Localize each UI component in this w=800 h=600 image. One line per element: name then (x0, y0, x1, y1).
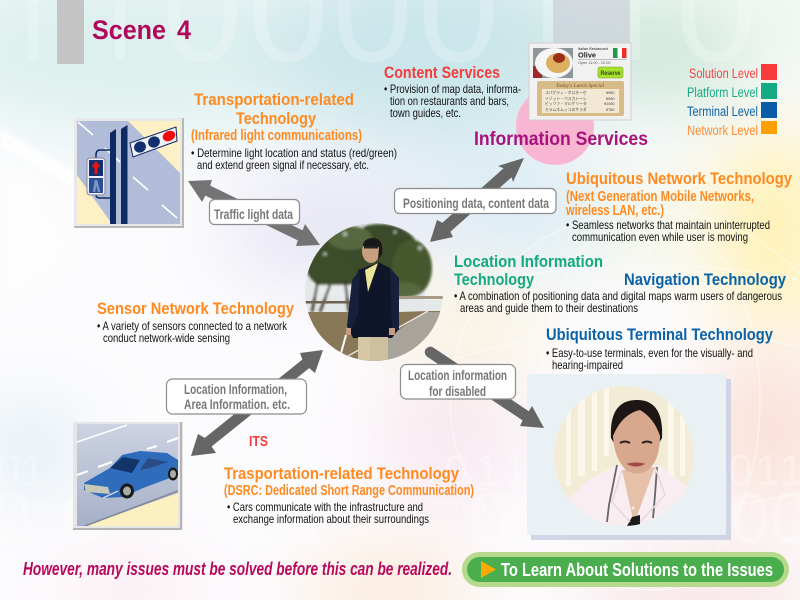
background digits bottom: 01001101 (732, 498, 800, 514)
text: content services description (384, 82, 521, 120)
text: network description (566, 218, 770, 244)
heading: transportation-related technology DSRC: (DSRC: Dedicated Short Range Communication) (224, 483, 474, 499)
text: network description: communication even while user is moving (572, 230, 748, 244)
heading: location information technology (454, 252, 603, 289)
text: terminal description: hearing-impaired (552, 358, 623, 372)
panel: doctor (527, 374, 731, 540)
heading: ubiquitous network technology: wireless LAN, etc.) (565, 203, 664, 219)
label: positioning data: Positioning data, content data (403, 195, 549, 211)
heading: ubiquitous network technology: (Next Generation Mobile Networks, (566, 189, 754, 205)
pink circle (516, 87, 594, 165)
restaurant card: リゾット・ペスカトーレ (545, 96, 587, 101)
heading: ubiquitous network technology (565, 169, 792, 219)
heading: transportation-related technology (191, 90, 362, 144)
label: location information (166, 379, 306, 414)
label: traffic light data: Traffic light data (214, 206, 293, 222)
restaurant card: ¥980 (606, 97, 614, 101)
background digits bottom: 10000 (190, 446, 306, 495)
restaurant card: スパゲティ・ボロネーゼ (545, 90, 587, 95)
background digits bottom (0, 446, 800, 559)
heading: content services: Content Services (384, 63, 500, 82)
text: traffic light description: and extend green signal if necessary, etc. (197, 158, 369, 172)
text: traffic light description (191, 146, 397, 172)
legend: terminal level: Terminal Level (687, 104, 758, 119)
text: DSRC description: • Cars communicate with the infrastructure and (227, 500, 423, 514)
heading: transportation-related technology DSRC (224, 464, 474, 499)
text: DSRC description (227, 500, 429, 526)
icon: play triangle (481, 561, 496, 578)
restaurant card: ¥1080 (604, 102, 615, 106)
restaurant card: Today's Lunch Special (556, 84, 605, 89)
label: location information: Area Information. etc. (184, 396, 290, 412)
heading: ITS: ITS (249, 433, 268, 450)
label: traffic light data (210, 200, 300, 224)
text: content services description: tion on restaurants and bars, (390, 94, 509, 108)
heading: transportation-related technology: Technology (236, 109, 316, 128)
legend: platform level: Platform Level (687, 85, 758, 100)
arrow: location information (191, 350, 323, 456)
button: learn about solutions (462, 552, 789, 587)
title: 4 (177, 15, 191, 45)
arrow: location information for disabled (425, 347, 544, 428)
scene tab marker (57, 0, 84, 64)
legend (687, 64, 777, 138)
arrow: traffic light data (188, 180, 320, 246)
text: content services description: town guides, etc. (390, 106, 461, 120)
legend: network level: Network Level (687, 123, 758, 138)
title: Scene (92, 15, 166, 45)
restaurant card: Italian Restaurant (578, 47, 609, 51)
restaurant card: Open 11:00 - 22:00 (578, 61, 610, 65)
legend: solution level: Solution Level (689, 66, 758, 81)
photo: man with white cane (305, 223, 445, 367)
background digits bottom: 1101010011 (430, 498, 527, 514)
heading: location information technology: Location Information (454, 252, 603, 271)
text: location description (454, 289, 782, 315)
restaurant card: ピッツァ・マルゲリータ (545, 101, 587, 106)
callout: issues: However, many issues must be solved before this can be realized. (23, 559, 452, 579)
label: location information for disabled (400, 364, 516, 399)
text: sensor description (97, 319, 288, 345)
background digits bottom: 011 (444, 446, 528, 495)
text: DSRC description: exchange information about their surroundings (233, 512, 429, 526)
grey block behind digits (553, 0, 630, 60)
restaurant card (529, 43, 631, 120)
text: content services description: • Provision of map data, informa- (384, 82, 521, 96)
arrow: positioning data (430, 158, 524, 242)
background digits bottom: 1 (190, 479, 230, 559)
icon: car (73, 422, 183, 529)
heading: sensor network technology: Sensor Network Technology (97, 299, 294, 318)
heading: transportation-related technology DSRC: Trasportation-related Technology (224, 464, 459, 483)
restaurant card: Reserve (600, 71, 621, 77)
heading: information services: Information Services (474, 129, 648, 150)
text: sensor description: conduct network-wide sensing (103, 331, 230, 345)
background digits bottom: 01 (470, 479, 550, 559)
text: sensor description: • A variety of sensors connected to a network (97, 319, 288, 333)
label: location information for disabled: for disabled (429, 383, 486, 399)
restaurant card: Olive (578, 50, 596, 60)
restaurant card: ¥980 (606, 91, 614, 95)
background digits top (28, 0, 757, 92)
heading: location information technology: Technology (454, 270, 534, 289)
background digits bottom: 1011000 (0, 498, 72, 514)
background digits bottom: 01 (250, 479, 330, 559)
restaurant card: カラムネムッコのサラダ (545, 107, 587, 112)
icon: traffic light (74, 118, 183, 227)
text: terminal description (546, 346, 753, 372)
restaurant card: ¥780 (606, 108, 614, 112)
text: traffic light description: • Determine light location and status (red/green) (191, 146, 397, 160)
background digits bottom: 0101 (189, 498, 220, 514)
text: location description: areas and guide them to their destinations (460, 301, 638, 315)
label: location information: Location Information, (184, 381, 287, 397)
photo: doctor (554, 386, 694, 530)
label: location information for disabled: Location information (408, 367, 507, 383)
label: positioning data (394, 188, 556, 214)
heading: transportation-related technology: Transportation-related (194, 90, 354, 109)
heading: transportation-related technology: (Infrared light communications) (191, 128, 362, 144)
